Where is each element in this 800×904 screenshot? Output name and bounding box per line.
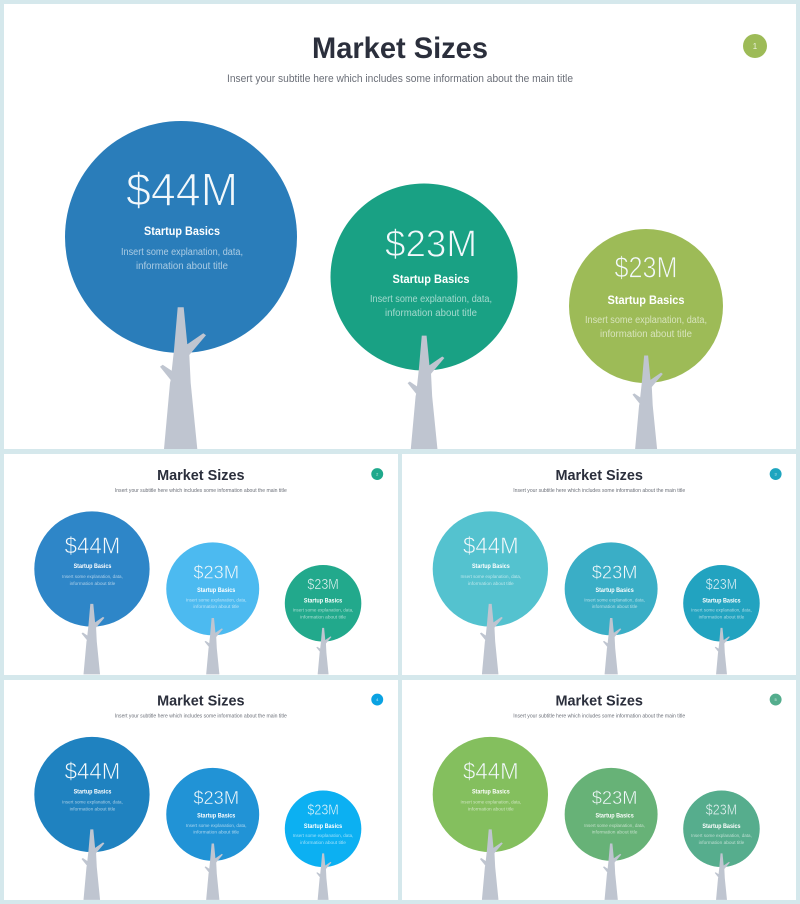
medium circle: Startup Basics: [595, 588, 634, 594]
large circle: information about title: [468, 806, 514, 812]
small circle: $23M: [706, 803, 737, 819]
tree trunk large: [82, 604, 104, 674]
medium circle: [166, 542, 259, 635]
tree trunk large: [82, 829, 104, 900]
page badge: [371, 694, 383, 706]
medium circle: information about title: [193, 604, 239, 610]
subtitle: Insert your subtitle here which includes some information about the main title: [227, 73, 573, 85]
medium circle: $23M: [193, 788, 239, 809]
small circle: $23M: [307, 803, 339, 819]
large circle: $44M: [463, 758, 519, 784]
page badge: [743, 34, 767, 58]
subtitle: Insert your subtitle here which includes some information about the main title: [115, 488, 287, 494]
small circle: Insert some explanation, data,: [293, 833, 353, 839]
large circle: Startup Basics: [74, 564, 112, 570]
medium circle: information about title: [592, 830, 638, 836]
page badge: [371, 468, 383, 480]
medium circle: Startup Basics: [392, 272, 470, 286]
large circle: [65, 121, 297, 353]
tree trunk large: [480, 604, 503, 674]
medium circle: Startup Basics: [197, 588, 236, 594]
large circle: information about title: [70, 806, 116, 812]
medium circle: Insert some explanation, data,: [186, 597, 247, 603]
small circle: $23M: [614, 252, 678, 284]
title: Market Sizes: [157, 694, 245, 710]
medium circle: $23M: [592, 788, 637, 809]
subtitle: Insert your subtitle here which includes some information about the main title: [513, 488, 685, 494]
small circle: [569, 229, 723, 383]
medium circle: $23M: [385, 224, 477, 266]
tree trunk large: [480, 829, 503, 900]
medium circle: Startup Basics: [595, 813, 634, 819]
tree trunk medium: [205, 844, 223, 900]
small circle: information about title: [300, 840, 346, 846]
tree trunk small: [715, 853, 730, 900]
small circle: $23M: [307, 577, 339, 593]
large circle: [433, 737, 548, 852]
small circle: Startup Basics: [608, 293, 685, 307]
small circle: Startup Basics: [702, 824, 741, 830]
medium circle: $23M: [592, 563, 637, 584]
small circle: information about title: [699, 615, 745, 621]
medium circle: [330, 184, 518, 370]
page badge: [770, 468, 782, 480]
panel: slide 5: [402, 680, 796, 900]
tree trunk small: [316, 628, 331, 674]
subtitle: Insert your subtitle here which includes some information about the main title: [115, 713, 287, 719]
title: Market Sizes: [157, 468, 245, 484]
small circle: information about title: [300, 615, 346, 621]
large circle: $44M: [65, 532, 120, 558]
large circle: [34, 737, 150, 852]
panel: main slide: [4, 4, 796, 449]
tree trunk small: [632, 355, 663, 449]
medium circle: $23M: [193, 563, 239, 584]
page badge: 2: [376, 472, 378, 477]
small circle: Startup Basics: [304, 598, 343, 604]
medium circle: Startup Basics: [197, 813, 236, 819]
small circle: $23M: [706, 577, 737, 593]
medium circle: information about title: [385, 308, 477, 319]
large circle: $44M: [65, 758, 120, 784]
medium circle: Insert some explanation, data,: [584, 823, 645, 829]
large circle: information about title: [70, 581, 116, 587]
page badge: [770, 694, 782, 706]
large circle: Insert some explanation, data,: [62, 574, 123, 580]
large circle: Startup Basics: [472, 789, 510, 795]
page badge: 1: [753, 42, 758, 51]
large circle: information about title: [136, 261, 228, 272]
medium circle: information about title: [592, 604, 638, 610]
large circle: $44M: [463, 532, 519, 558]
page badge: 3: [775, 472, 778, 477]
medium circle: Insert some explanation, data,: [186, 823, 247, 829]
small circle: Insert some explanation, data,: [293, 608, 353, 614]
tree trunk medium: [205, 618, 223, 674]
small circle: information about title: [600, 329, 692, 340]
page badge: 4: [376, 697, 379, 702]
title: Market Sizes: [555, 468, 643, 484]
small circle: [683, 791, 760, 867]
large circle: Insert some explanation, data,: [62, 799, 123, 805]
medium circle: [565, 542, 658, 635]
large circle: Startup Basics: [144, 224, 220, 238]
medium circle: Insert some explanation, data,: [584, 597, 645, 603]
title: Market Sizes: [312, 32, 488, 65]
large circle: Insert some explanation, data,: [461, 574, 521, 580]
medium circle: Insert some explanation, data,: [370, 294, 492, 305]
subtitle: Insert your subtitle here which includes some information about the main title: [513, 713, 685, 719]
small circle: [285, 791, 361, 867]
tree trunk medium: [603, 844, 621, 900]
title: Market Sizes: [555, 694, 643, 710]
large circle: [34, 511, 150, 627]
tree trunk medium: [408, 336, 444, 449]
tree trunk small: [316, 853, 331, 900]
large circle: information about title: [468, 581, 514, 587]
tree trunk medium: [603, 618, 621, 674]
small circle: Startup Basics: [702, 598, 741, 604]
large circle: Startup Basics: [74, 789, 112, 795]
large circle: $44M: [126, 164, 238, 216]
panel: slide 4: [4, 680, 398, 900]
medium circle: information about title: [193, 830, 239, 836]
medium circle: [565, 768, 658, 861]
large circle: Startup Basics: [472, 564, 510, 570]
large circle: [433, 511, 548, 627]
small circle: Startup Basics: [304, 824, 343, 830]
panel: slide 3: [402, 454, 796, 675]
tree trunk large: [160, 307, 206, 449]
medium circle: [166, 768, 259, 861]
tree trunk small: [715, 628, 730, 674]
page badge: 5: [775, 697, 778, 702]
small circle: Insert some explanation, data,: [691, 608, 752, 614]
small circle: Insert some explanation, data,: [691, 833, 752, 839]
large circle: Insert some explanation, data,: [121, 247, 243, 258]
small circle: information about title: [699, 840, 745, 846]
small circle: Insert some explanation, data,: [585, 315, 707, 326]
small circle: [683, 565, 760, 642]
small circle: [285, 565, 361, 642]
large circle: Insert some explanation, data,: [461, 799, 521, 805]
panel: slide 2: [4, 454, 398, 675]
